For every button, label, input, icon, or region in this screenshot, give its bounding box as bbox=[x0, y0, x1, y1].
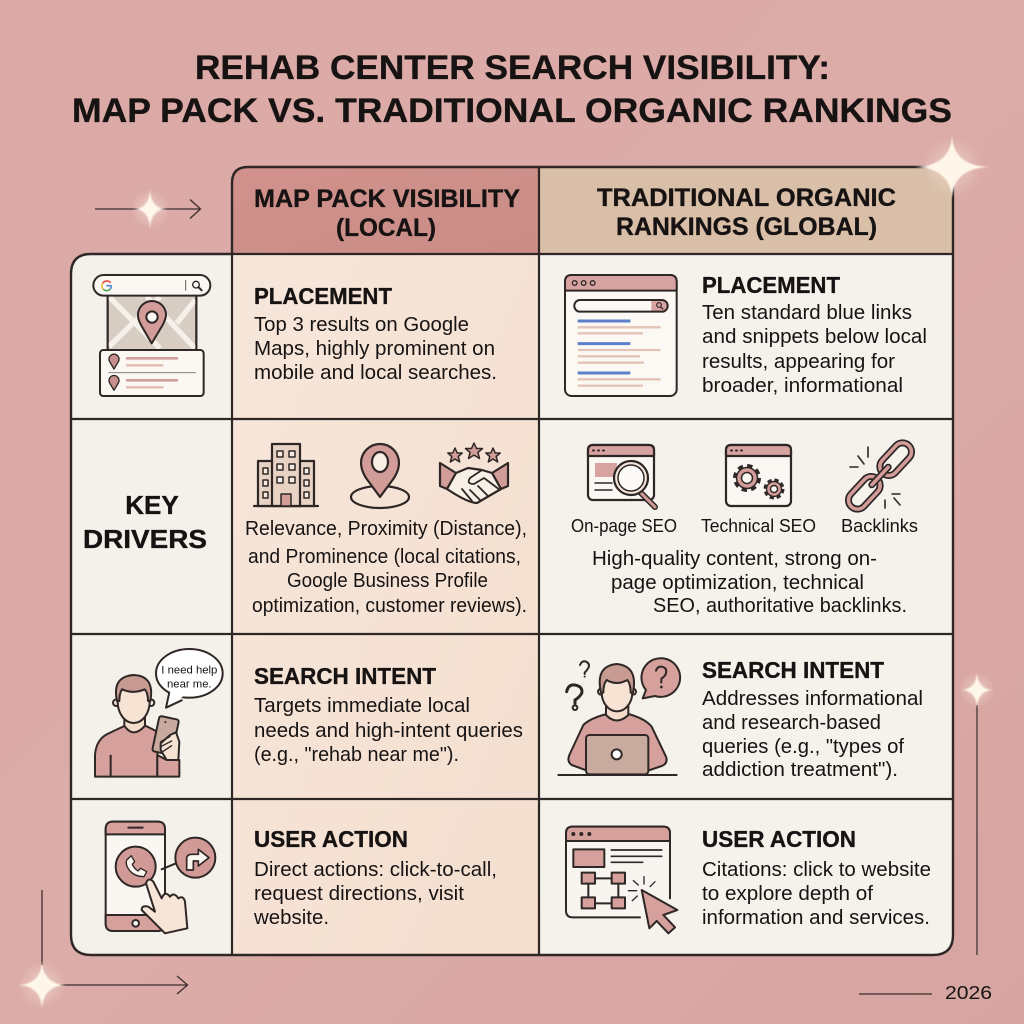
icon: handshake with stars bbox=[440, 443, 508, 503]
year label bbox=[859, 982, 992, 1003]
column header: organic: RANKINGS (GLOBAL) bbox=[616, 213, 877, 241]
text: organic search intent: and research-based bbox=[702, 712, 881, 734]
icon: technical seo bbox=[726, 445, 791, 506]
text: map pack placement: PLACEMENT bbox=[254, 283, 392, 309]
text: organic key drivers: High-quality content, strong on- bbox=[592, 548, 877, 570]
column header: organic: TRADITIONAL ORGANIC bbox=[597, 184, 896, 212]
row label: key drivers: DRIVERS bbox=[83, 524, 207, 554]
text: map pack placement: Maps, highly prominent on bbox=[254, 338, 495, 360]
decorative arrow with sparkle, top left bbox=[95, 189, 200, 229]
icon: on-page seo bbox=[588, 445, 655, 507]
icon: person with phone and speech bubble: near me. bbox=[167, 678, 212, 690]
text: organic user action: Citations: click to website bbox=[702, 859, 931, 881]
text: organic placement: PLACEMENT bbox=[702, 272, 840, 298]
icon: phone with call and directions bbox=[106, 822, 215, 933]
label: technical seo: Technical SEO bbox=[701, 516, 816, 536]
text: organic key drivers: SEO, authoritative backlinks. bbox=[653, 595, 907, 617]
title: MAP PACK VS. TRADITIONAL ORGANIC RANKINGS bbox=[72, 92, 952, 130]
column header: organic bbox=[597, 184, 896, 241]
text: organic key drivers bbox=[592, 548, 907, 617]
text: map pack key drivers bbox=[245, 518, 527, 617]
icon: google map search bbox=[93, 275, 210, 396]
text: map pack key drivers: and Prominence (local citations, bbox=[248, 546, 521, 568]
row label: key drivers: KEY bbox=[125, 490, 179, 520]
icon: backlinks chain bbox=[845, 439, 915, 513]
text: organic placement: results, appearing for bbox=[702, 351, 895, 373]
text: organic user action: USER ACTION bbox=[702, 826, 856, 852]
column header: map pack: MAP PACK VISIBILITY bbox=[254, 185, 520, 213]
text: organic user action bbox=[702, 826, 931, 929]
title bbox=[72, 49, 952, 130]
text: map pack search intent: (e.g., "rehab near me"). bbox=[254, 744, 459, 766]
text: organic placement: broader, informational bbox=[702, 375, 903, 397]
icon: browser search results bbox=[565, 275, 677, 396]
text: organic search intent: queries (e.g., "types of bbox=[702, 736, 904, 758]
text: map pack user action: request directions, visit bbox=[254, 883, 464, 905]
text: organic placement bbox=[702, 272, 927, 397]
title: REHAB CENTER SEARCH VISIBILITY: bbox=[195, 49, 830, 87]
text: map pack user action: website. bbox=[253, 907, 329, 929]
text: organic user action: to explore depth of bbox=[702, 883, 873, 905]
text: organic user action: information and services. bbox=[702, 907, 930, 929]
text: map pack user action: USER ACTION bbox=[254, 826, 408, 852]
text: organic search intent bbox=[702, 657, 923, 781]
text: organic placement: Ten standard blue links bbox=[702, 302, 912, 324]
column header: map pack bbox=[254, 185, 520, 242]
text: map pack search intent bbox=[254, 663, 523, 766]
text: map pack user action: Direct actions: click-to-call, bbox=[254, 859, 497, 881]
text: map pack key drivers: Google Business Profile bbox=[287, 570, 488, 592]
icon: location pin bbox=[351, 444, 409, 508]
icon: person with laptop and questions bbox=[558, 658, 680, 775]
text: organic search intent: addiction treatment"). bbox=[702, 759, 898, 781]
text: organic search intent: SEARCH INTENT bbox=[702, 657, 884, 683]
column header: map pack: (LOCAL) bbox=[336, 214, 436, 242]
row label: key drivers bbox=[83, 490, 207, 554]
icon: website sitemap with cursor bbox=[566, 827, 677, 933]
text: organic placement: and snippets below local bbox=[702, 326, 927, 348]
text: map pack search intent: Targets immediate local bbox=[254, 695, 470, 717]
icon: person with phone and speech bubble bbox=[95, 649, 223, 777]
text: map pack placement: mobile and local searches. bbox=[254, 362, 497, 384]
label: on-page seo: On-page SEO bbox=[571, 516, 677, 536]
label: backlinks: Backlinks bbox=[841, 516, 918, 536]
sparkle with arrow, bottom left bbox=[18, 890, 188, 1009]
sparkle: table corner bbox=[914, 135, 990, 199]
text: map pack placement bbox=[254, 283, 497, 384]
text: organic key drivers: page optimization, technical bbox=[611, 572, 864, 594]
sparkle with line, right bbox=[959, 672, 995, 955]
icon: building bbox=[254, 444, 318, 506]
text: map pack user action bbox=[253, 826, 497, 929]
text: map pack search intent: needs and high-intent queries bbox=[254, 720, 523, 742]
text: map pack search intent: SEARCH INTENT bbox=[254, 663, 436, 689]
icon: person with phone and speech bubble: I need help bbox=[161, 665, 217, 677]
text: map pack key drivers: Relevance, Proximity (Distance), bbox=[245, 518, 527, 540]
text: map pack key drivers: optimization, customer reviews). bbox=[252, 595, 527, 617]
text: map pack placement: Top 3 results on Google bbox=[254, 314, 469, 336]
text: organic search intent: Addresses informational bbox=[702, 688, 923, 710]
comparison table bbox=[71, 167, 953, 955]
year label: 2026 bbox=[945, 982, 992, 1003]
